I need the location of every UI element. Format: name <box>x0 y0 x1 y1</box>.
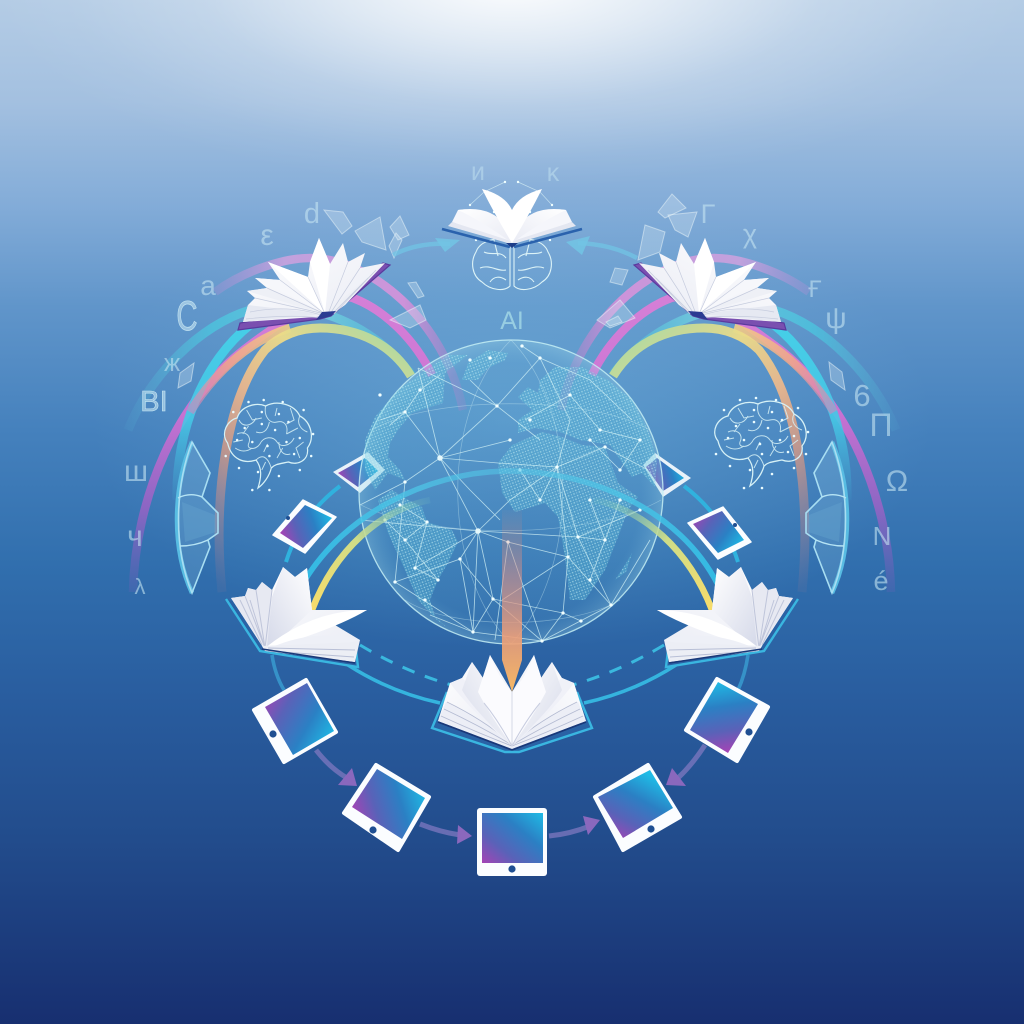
floating AI label: AI <box>500 307 524 335</box>
small tablet mid right <box>688 507 751 559</box>
floating letters right: Ғ <box>808 276 822 303</box>
lower ring arc left <box>348 665 440 703</box>
floating letters left: ε <box>260 219 274 252</box>
right faceted shield <box>806 442 847 593</box>
floating letters right: Π <box>869 407 893 443</box>
lower right book <box>657 567 798 667</box>
network nodes <box>380 346 640 641</box>
small tablet upper left <box>333 452 385 493</box>
left rainbow arcs <box>128 258 463 592</box>
bottom centre book <box>432 655 592 752</box>
floating letters left: ж <box>164 350 180 377</box>
network mesh lines <box>360 346 650 641</box>
small tablet upper right <box>643 453 691 497</box>
floating letters right: ψ <box>825 302 847 335</box>
lower left book <box>226 567 367 667</box>
outer arc right <box>738 655 748 690</box>
floating letters right: 6 <box>853 378 871 413</box>
left cyan link to small tablets <box>286 486 340 562</box>
floating letters left: a <box>200 270 216 301</box>
top centre book <box>442 189 582 248</box>
left shards <box>178 210 426 388</box>
dashed arc right <box>569 645 664 686</box>
right yellow arc <box>594 500 712 610</box>
arrowhead left top <box>435 238 460 252</box>
floating letters right: é <box>873 566 889 596</box>
latitude and meridian curves <box>361 340 661 644</box>
cross-globe cyan arc <box>305 471 718 585</box>
tablet lower left <box>344 765 429 850</box>
floating letters right: Γ <box>701 199 716 229</box>
continents <box>365 350 657 628</box>
floating letters top <box>471 158 560 187</box>
floating letters left <box>124 198 320 599</box>
floating letters left: d <box>304 198 320 230</box>
arrowhead right top <box>566 236 590 255</box>
left faceted shield <box>177 442 218 593</box>
tablet far left <box>254 680 336 762</box>
right shards <box>597 194 845 390</box>
left brain <box>224 400 313 490</box>
globe <box>359 340 663 644</box>
floating letters top: κ <box>547 159 560 187</box>
floating letters left: ш <box>124 455 148 488</box>
upper left book <box>238 238 390 330</box>
arrow tablet 3 to 4 <box>549 816 600 836</box>
tablet lower right <box>595 765 680 850</box>
small tablet mid left <box>273 500 336 553</box>
floating letters right: N <box>873 521 891 551</box>
left yellow arc <box>312 500 430 610</box>
arrow tablet 5 to 4 <box>666 745 705 786</box>
floating letters top: и <box>471 158 485 186</box>
floating letters left: λ <box>134 574 146 599</box>
floating letters right: χ <box>743 219 757 249</box>
floating letters right: Ω <box>886 465 908 498</box>
right rainbow arcs <box>561 258 896 592</box>
tablet centre <box>477 808 547 876</box>
floating letters left: BI <box>140 386 168 418</box>
floating letters left: C <box>176 292 198 339</box>
network hub nodes <box>440 458 478 531</box>
small arrows near top <box>393 244 450 255</box>
right cyan link to small tablets <box>684 486 738 562</box>
arrow tablet 1 to 2 <box>316 750 357 786</box>
top centre brain <box>470 182 552 289</box>
floating letters right <box>701 199 908 596</box>
arrow tablet 2 to 3 <box>420 824 472 844</box>
orange light ray <box>502 510 522 692</box>
outer arc left <box>272 655 284 690</box>
right brain <box>715 398 808 488</box>
upper right book <box>634 238 786 330</box>
right arrow near top <box>578 243 637 258</box>
lower ring arc right <box>584 665 676 703</box>
floating letters left: ч <box>127 520 143 553</box>
dashed arc left <box>360 645 455 686</box>
tablet far right <box>686 679 768 761</box>
